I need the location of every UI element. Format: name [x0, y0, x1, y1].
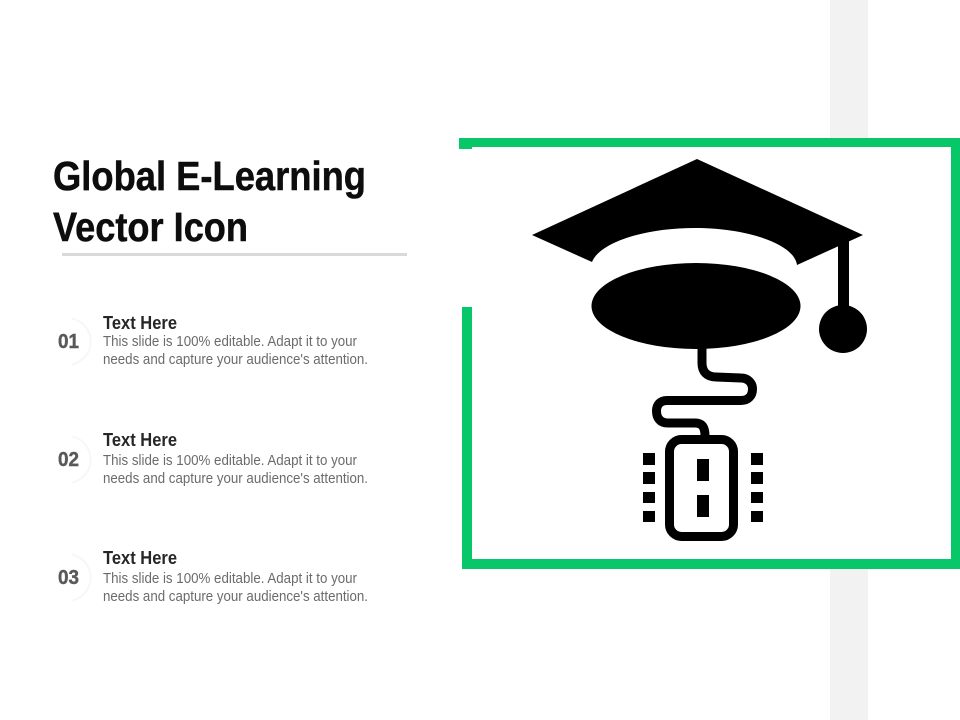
- list item 03: [58, 548, 368, 605]
- green frame: [459, 138, 960, 569]
- icon: graduation cap: [532, 159, 867, 353]
- title: [53, 153, 366, 250]
- title: Global E-Learning: [53, 153, 366, 199]
- list item 02: This slide is 100% editable. Adapt it to your: [103, 453, 357, 469]
- list item 01: Text Here: [103, 313, 177, 333]
- list item 02: 02: [58, 449, 79, 471]
- list item 01: 01: [58, 331, 79, 353]
- list item 01: needs and capture your audience's attention.: [103, 352, 368, 368]
- list item 01: This slide is 100% editable. Adapt it to your: [103, 334, 357, 350]
- title: Vector Icon: [53, 204, 248, 250]
- list item 01: [58, 313, 368, 368]
- icon: computer mouse: [643, 348, 763, 536]
- list item 03: This slide is 100% editable. Adapt it to your: [103, 571, 357, 587]
- list item 02: [58, 430, 368, 487]
- list item 03: 03: [58, 567, 79, 589]
- list item 03: Text Here: [103, 548, 177, 568]
- list item 02: Text Here: [103, 430, 177, 450]
- list item 02: needs and capture your audience's attention.: [103, 471, 368, 487]
- list item 03: needs and capture your audience's attention.: [103, 589, 368, 605]
